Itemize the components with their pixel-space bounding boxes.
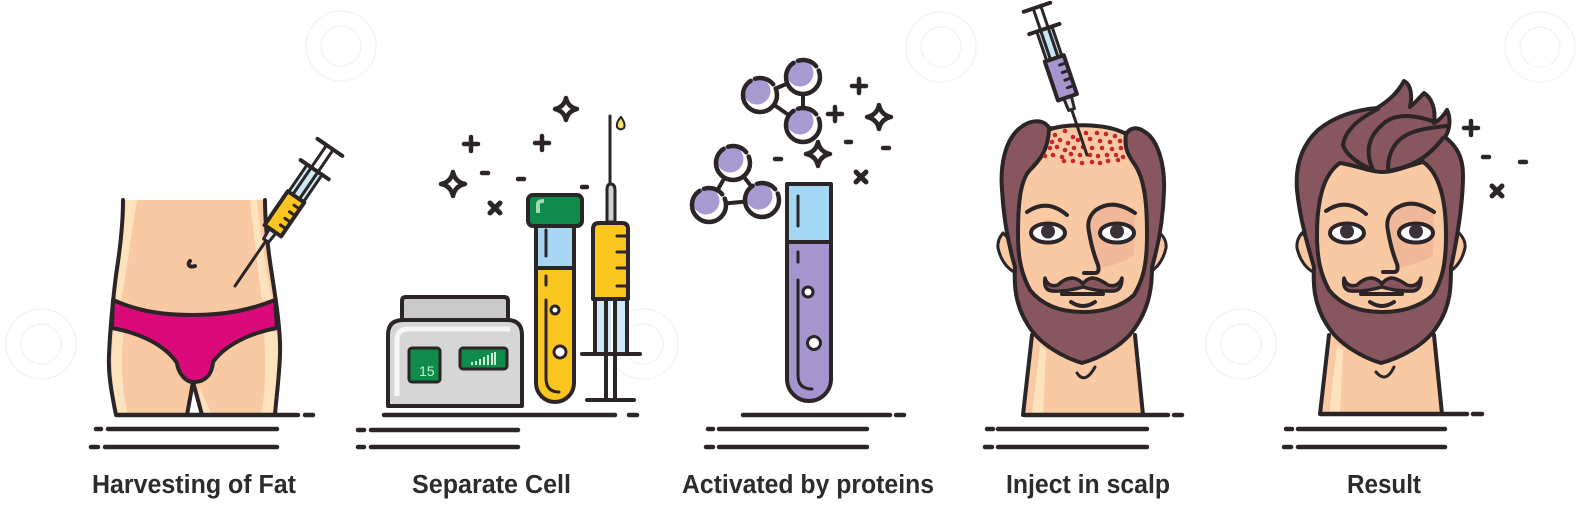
face	[1018, 125, 1147, 312]
shaded cheek	[1090, 206, 1135, 268]
hair sides and beard	[1002, 121, 1164, 363]
ground lines	[1284, 414, 1482, 447]
syringe	[1022, 2, 1102, 160]
mustache	[1045, 278, 1122, 291]
neck	[1320, 335, 1442, 414]
underwear	[112, 300, 277, 382]
ground lines	[985, 415, 1182, 447]
brows and nose	[1326, 204, 1434, 272]
ground lines	[91, 415, 313, 447]
label: Inject in scalp: Inject in scalp	[1006, 471, 1170, 499]
head	[998, 121, 1166, 415]
label: Harvesting of Fat: Harvesting of Fat	[92, 471, 296, 499]
panel: activated by proteins	[682, 60, 934, 499]
panel: result	[1284, 81, 1526, 499]
label: Activated by proteins: Activated by proteins	[682, 471, 934, 499]
green level display	[460, 348, 507, 369]
ears	[1297, 233, 1319, 272]
shaded cheek	[1389, 206, 1434, 268]
test tube: yellow	[528, 195, 582, 402]
vertical syringe	[582, 116, 640, 400]
centrifuge machine	[388, 297, 522, 406]
ground lines	[358, 415, 637, 447]
sparkles and signs	[441, 98, 587, 213]
mouth	[1062, 294, 1103, 306]
ears	[998, 233, 1020, 272]
hair curls	[1343, 109, 1446, 171]
hair and beard	[1297, 81, 1463, 363]
ground lines	[706, 415, 904, 447]
signs	[1464, 121, 1526, 196]
panel: separate cell	[358, 98, 640, 499]
green cap	[528, 195, 582, 226]
sparkles and signs	[775, 79, 891, 182]
brows and nose	[1027, 205, 1135, 273]
label: Separate Cell: Separate Cell	[412, 471, 571, 499]
label: Result: Result	[1347, 471, 1421, 499]
mouth	[1361, 294, 1402, 306]
molecule top	[743, 60, 820, 142]
torso	[109, 200, 280, 415]
molecule bottom	[692, 146, 779, 222]
eyes	[1330, 224, 1433, 242]
scalp injection dots	[1043, 129, 1125, 165]
neck	[1023, 335, 1143, 415]
green timer display	[409, 348, 440, 382]
test tube: purple	[787, 184, 831, 401]
centrifuge machine: 15	[419, 363, 435, 379]
eyes	[1031, 224, 1134, 242]
panel: inject in scalp	[985, 2, 1182, 499]
navel	[189, 261, 195, 267]
panel: harvesting of fat	[91, 138, 344, 499]
syringe	[221, 138, 344, 296]
head with restored hair	[1297, 81, 1465, 414]
face	[1317, 162, 1446, 312]
mustache	[1344, 278, 1421, 291]
